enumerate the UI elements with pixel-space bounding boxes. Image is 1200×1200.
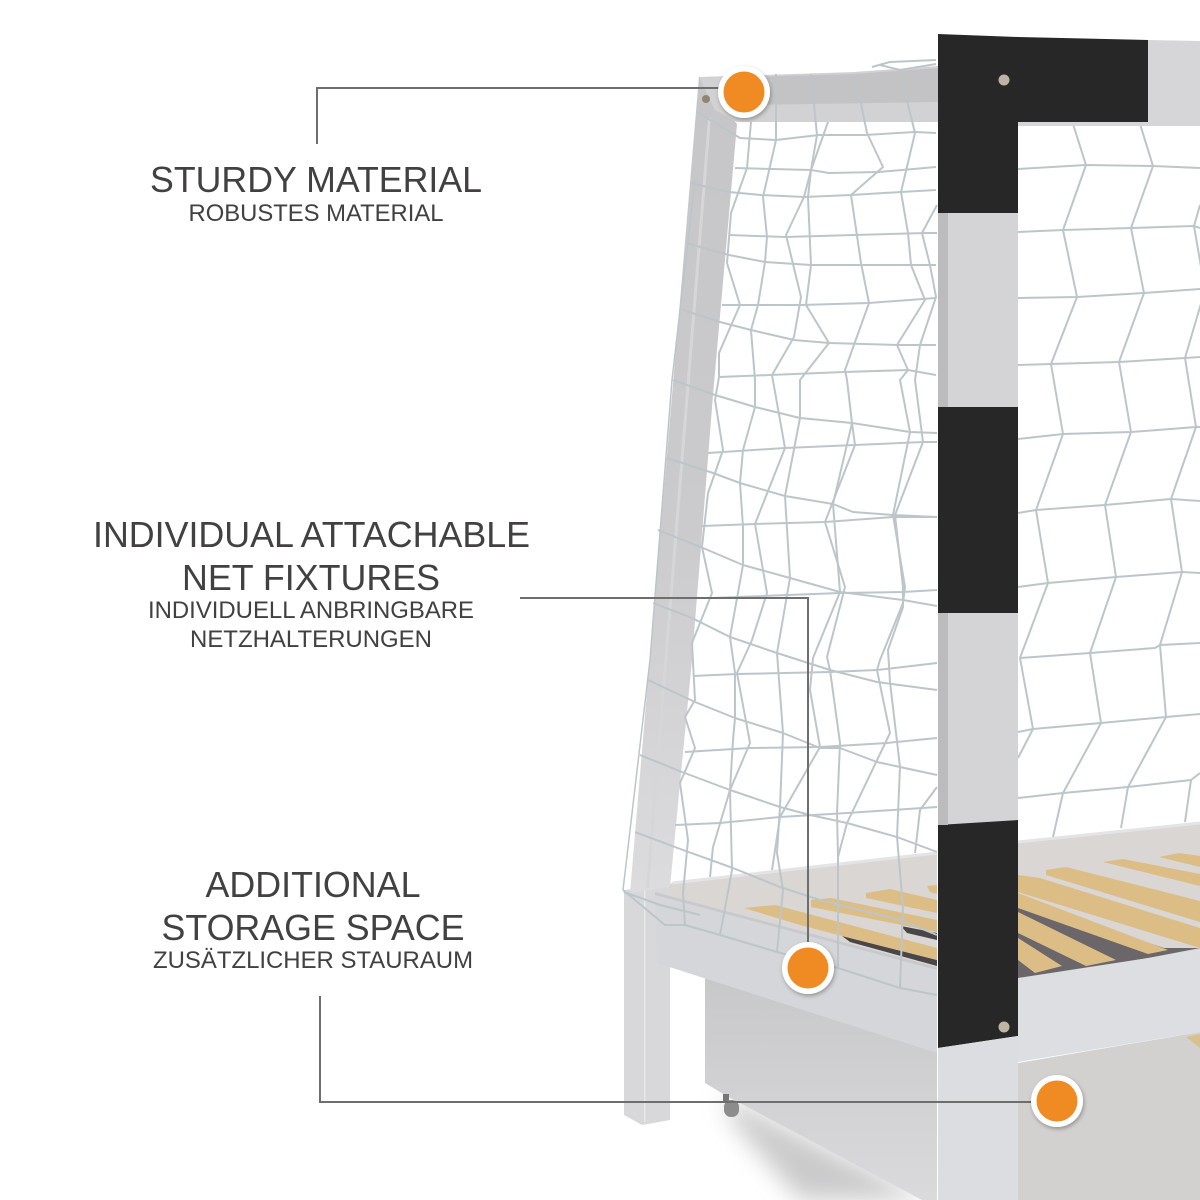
- text block: net fixtures: NET FIXTURES: [182, 557, 440, 598]
- rail front edge: [655, 892, 937, 970]
- bed wall top lip: [672, 823, 1200, 883]
- net: [623, 60, 1200, 995]
- text block: net fixtures: NETZHALTERUNGEN: [190, 626, 432, 653]
- inner bed wall right: [1018, 823, 1200, 978]
- rear leg: [624, 885, 670, 1125]
- drawer right face: [1018, 1032, 1200, 1200]
- slatted base left: [744, 885, 937, 966]
- leader: sturdy material: [317, 88, 722, 144]
- post segment: black top: [938, 34, 1018, 213]
- text block: sturdy material: [150, 159, 482, 227]
- net: side section horizontals: [623, 112, 937, 995]
- drawer wood detail: [1186, 1034, 1200, 1048]
- text block: storage space: ADDITIONAL: [206, 864, 420, 905]
- goal side leg: [630, 76, 737, 893]
- text block: storage space: [153, 864, 473, 974]
- marker: sturdy material: [718, 66, 770, 118]
- floor shadow: [722, 1095, 930, 1200]
- screw bottom: [998, 1022, 1010, 1032]
- text block: net fixtures: [93, 514, 530, 653]
- screw top: [998, 74, 1010, 86]
- leader: net fixtures: [520, 598, 808, 945]
- inner bed wall left: [655, 853, 937, 967]
- caster wheel: [723, 1094, 739, 1117]
- post segment: light lower: [938, 613, 1018, 825]
- text block: sturdy material: ROBUSTES MATERIAL: [188, 200, 444, 227]
- side rail: [655, 892, 937, 1053]
- goal post: [938, 34, 1200, 1200]
- goal top rail: [699, 66, 938, 122]
- net: right section: [1018, 124, 1200, 837]
- text block: storage space: ZUSÄTZLICHER STAURAUM: [153, 947, 473, 974]
- text block: sturdy material: STURDY MATERIAL: [150, 159, 482, 200]
- right rail: [1018, 950, 1200, 1062]
- post side shade: [938, 213, 948, 825]
- slatted base right: [1018, 853, 1200, 978]
- post segment: black middle: [938, 407, 1018, 613]
- bed illustration: [623, 34, 1200, 1200]
- crossbar black: [1018, 37, 1148, 122]
- marker: net fixtures: [782, 942, 834, 994]
- post segment: light upper: [938, 213, 1018, 407]
- crossbar light: [1018, 40, 1200, 126]
- leader: storage space: [320, 996, 1032, 1102]
- marker: storage space: [1031, 1075, 1083, 1127]
- net: side section verticals: [680, 60, 937, 988]
- post segment: light base: [938, 1036, 1018, 1200]
- text block: net fixtures: INDIVIDUELL ANBRINGBARE: [148, 597, 474, 624]
- post segment: black lower: [938, 820, 1018, 1048]
- leader lines: [317, 88, 1032, 1102]
- text block: storage space: STORAGE SPACE: [162, 907, 464, 948]
- text block: net fixtures: INDIVIDUAL ATTACHABLE: [93, 514, 530, 555]
- drawer left face: [705, 978, 937, 1200]
